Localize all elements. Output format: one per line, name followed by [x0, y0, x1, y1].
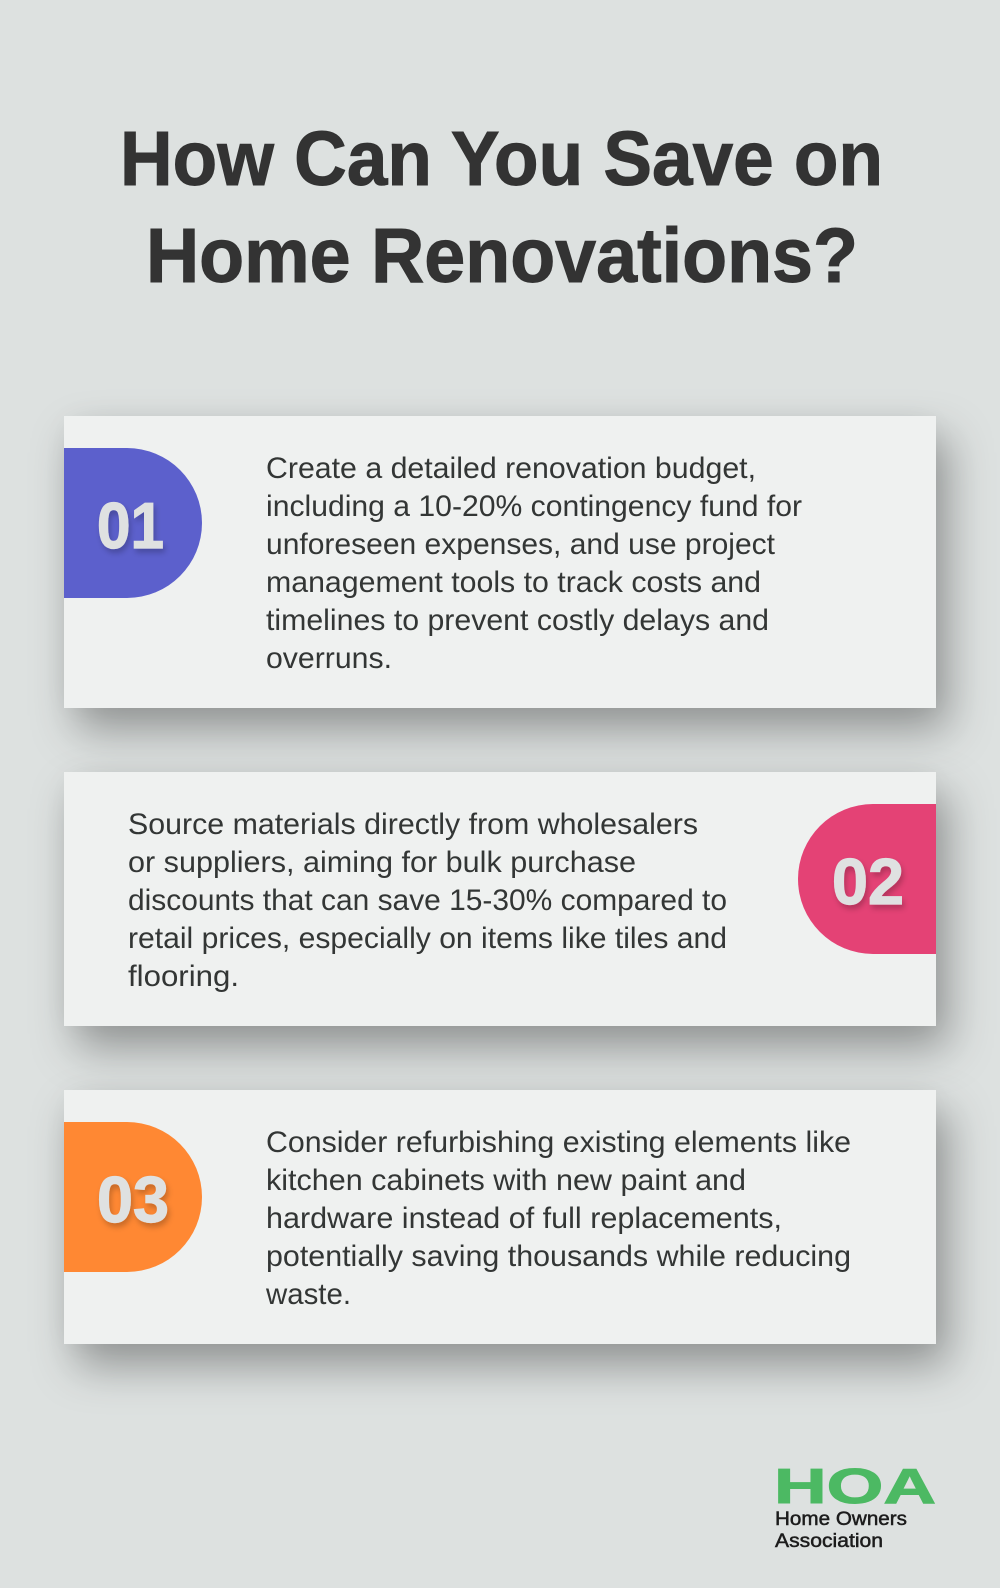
text block 02: discounts that can save 15-30% compared to [128, 884, 727, 917]
text block 01: timelines to prevent costly delays and [266, 604, 769, 637]
text block 02: flooring. [128, 960, 239, 993]
text block 03: Consider refurbishing existing elements like [266, 1126, 851, 1159]
logo caption: Home Owners [775, 1508, 907, 1530]
text block 03: hardware instead of full replacements, [266, 1202, 782, 1235]
text block 01: including a 10-20% contingency fund for [266, 490, 802, 523]
text block 03: waste. [265, 1278, 351, 1311]
badge 03: 03 [97, 1163, 169, 1236]
text block 03: potentially saving thousands while reducing [266, 1240, 851, 1273]
logo caption: Association [775, 1530, 883, 1552]
logo mark: HOA [774, 1460, 936, 1514]
title [120, 116, 883, 299]
title: Home Renovations? [146, 213, 858, 299]
panel: step 03 [64, 1090, 936, 1344]
text block 01 [266, 452, 802, 675]
card background 03 [64, 1090, 936, 1344]
text block 02: retail prices, especially on items like tiles and [128, 922, 727, 955]
text block 01: Create a detailed renovation budget, [266, 452, 756, 485]
badge 01 [64, 448, 202, 598]
badge 02 [798, 804, 936, 954]
text block 02 [128, 808, 727, 993]
title: How Can You Save on [120, 116, 883, 202]
badge 02: 02 [832, 845, 904, 918]
panel: step 01 [64, 416, 936, 708]
logo: HOA Home Owners Association [774, 1460, 936, 1552]
text block 01: overruns. [266, 642, 392, 675]
text block 02: or suppliers, aiming for bulk purchase [128, 846, 636, 879]
panel: step 02 [64, 772, 936, 1026]
badge 01: 01 [97, 489, 164, 562]
text block 01: unforeseen expenses, and use project [266, 528, 776, 561]
text block 02: Source materials directly from wholesalers [128, 808, 698, 841]
card background 02 [64, 772, 936, 1026]
text block 03: kitchen cabinets with new paint and [266, 1164, 746, 1197]
badge 03 [64, 1122, 202, 1272]
logo caption [775, 1508, 907, 1552]
text block 03 [265, 1126, 851, 1311]
text block 01: management tools to track costs and [266, 566, 761, 599]
card background 01 [64, 416, 936, 708]
